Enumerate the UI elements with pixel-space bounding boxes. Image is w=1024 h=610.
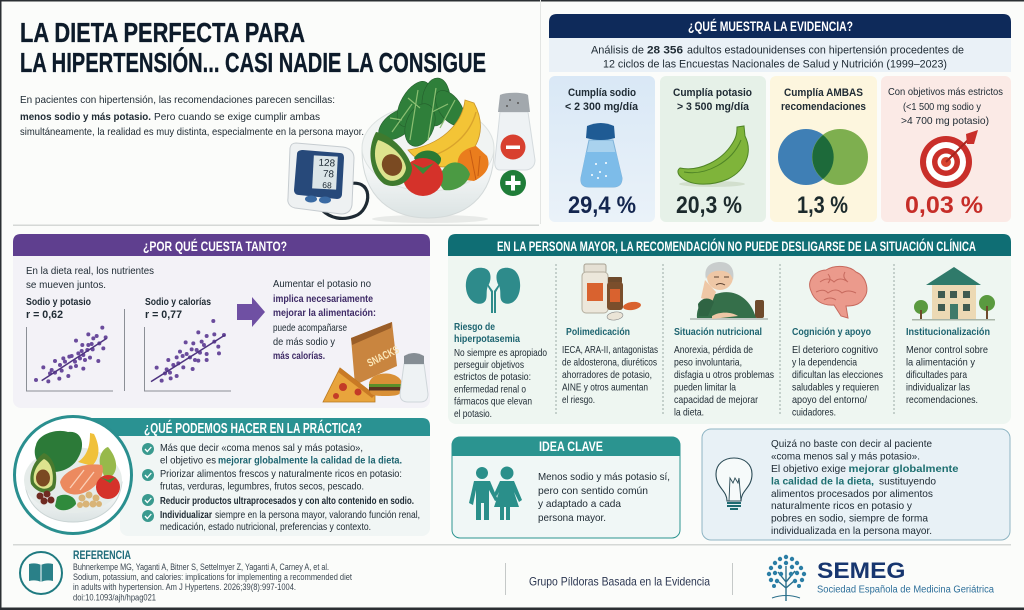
key idea text: y adaptado a cada	[538, 498, 621, 510]
column: institutionalization: Menor control sobre	[906, 344, 988, 356]
icon: processed food: SNACKS	[365, 344, 401, 370]
icon: brain	[810, 266, 867, 318]
column: hyperkalemia: fármacos que elevan	[454, 396, 532, 408]
why header	[13, 234, 430, 256]
column: institutionalization: individualizar las	[906, 382, 970, 394]
callout text: la calidad de la dieta,	[771, 476, 874, 488]
column: hyperkalemia: perseguir objetivos	[454, 359, 524, 371]
column: institutionalization: la alimentación y	[906, 356, 976, 368]
callout text: pobres en sodio, siempre de forma	[771, 512, 928, 524]
column: cognition: apoyo del entorno/	[792, 394, 867, 406]
card: potassium: Cumplía potasio	[673, 87, 752, 99]
intro text	[20, 94, 364, 138]
card: sodium: Cumplía sodio	[568, 87, 636, 99]
column: institutionalization: dificultades para	[906, 369, 967, 381]
column: cognition: dificultan las elecciones	[792, 369, 883, 381]
reference	[20, 550, 352, 602]
venn diagram	[778, 129, 868, 185]
callout text: naturalmente ricos en potasio y	[771, 500, 913, 512]
panel: why it is hard	[13, 234, 430, 408]
column: institutionalization: Institucionalización	[906, 326, 990, 338]
icon: processed food	[323, 322, 428, 402]
evidence intro	[549, 38, 1011, 72]
column: nutrition: Anorexia, pérdida de	[674, 344, 753, 356]
evidence intro: adultos estadounidenses con hipertensión procedentes de	[687, 44, 964, 56]
callout text: «coma menos sal y más potasio».	[771, 450, 920, 462]
card: stricter: (<1 500 mg sodio y	[903, 101, 982, 113]
why conclusion text: mejorar la alimentación:	[273, 307, 376, 319]
evidence header	[549, 14, 1011, 38]
practice list: mejorar globalmente la calidad de la dieta.	[218, 454, 402, 466]
column: institutionalization	[906, 267, 995, 406]
card: stricter: >4 700 mg potasio)	[901, 115, 989, 127]
icon: light bulb	[716, 458, 752, 509]
key idea header: IDEA CLAVE	[539, 439, 603, 454]
icon: tree	[767, 555, 806, 601]
column: cognition: Cognición y apoyo	[792, 326, 871, 338]
intro text: menos sodio y más potasio.	[20, 111, 151, 123]
panel: callout	[702, 429, 1010, 540]
column: hyperkalemia: enfermedad renal o	[454, 384, 526, 396]
panel: key idea	[452, 437, 680, 538]
card: stricter	[881, 76, 1011, 222]
illustration: bowl of vegetables	[362, 76, 494, 223]
column: cognition: El deterioro cognitivo	[792, 344, 878, 356]
intro text: Pero cuando se exige cumplir ambas	[154, 111, 320, 123]
chart: sodium and potassium: Sodio y potasio	[26, 296, 91, 308]
icon: pill bottles	[582, 264, 641, 321]
title: LA DIETA PERFECTA PARA	[20, 17, 305, 48]
column: hyperkalemia: Riesgo de	[454, 321, 495, 333]
logo: SEMEG	[767, 555, 994, 601]
logo: SEMEG: SEMEG	[817, 558, 906, 583]
card: potassium: > 3 500 mg/día	[677, 101, 750, 113]
intro text: En pacientes con hipertensión, las recomendaciones parecen sencillas:	[20, 94, 335, 106]
chart: sodium and potassium	[26, 296, 113, 391]
arrow	[237, 297, 265, 327]
practice header: ¿QUÉ PODEMOS HACER EN LA PRÁCTICA?	[144, 420, 362, 437]
icon: blood pressure monitor: 128	[318, 158, 336, 170]
practice list: siempre en la persona mayor, valorando función renal,	[215, 509, 420, 521]
key idea text	[538, 471, 670, 524]
callout text: alimentos procesados por alimentos	[771, 488, 933, 500]
why conclusion text: más calorías.	[273, 350, 325, 362]
icon: kidneys	[466, 268, 520, 313]
clinical header	[448, 234, 1011, 256]
reference: doi:10.1093/ajh/hpag021	[73, 592, 156, 602]
panel: older person	[448, 234, 1011, 424]
practice list: Individualizar	[160, 509, 212, 521]
card: sodium	[549, 76, 655, 222]
reference: in adults with hypertension. Am J Hypertens. 2026;39(8):997-1004.	[73, 582, 296, 592]
column: polypharmacy: de aldosterona, diuréticos	[562, 356, 657, 368]
icon: older couple	[469, 466, 522, 520]
practice list: medicación, estado nutricional, preferencias y contexto.	[160, 521, 371, 533]
key idea text: persona mayor.	[538, 512, 606, 524]
logo: SEMEG: Sociedad Española de Medicina Geriátrica	[817, 584, 994, 596]
evidence header: ¿QUÉ MUESTRA LA EVIDENCIA?	[688, 19, 853, 34]
column: polypharmacy: Polimedicación	[566, 326, 630, 338]
column: nutrition: pueden limitar la	[674, 382, 736, 394]
icon: target	[920, 130, 978, 188]
icon: blood pressure monitor: 78	[323, 169, 335, 180]
column: nutrition: disfagia u otros problemas	[674, 369, 774, 381]
card: potassium: 20,3 %	[676, 192, 742, 219]
chart: sodium and calories: r = 0,77	[145, 309, 182, 321]
column: hyperkalemia: hiperpotasemia	[454, 333, 520, 345]
why conclusion text: de más sodio y	[273, 336, 336, 348]
practice list: el objetivo es	[160, 454, 216, 466]
card: sodium: < 2 300 mg/día	[565, 101, 639, 113]
column: cognition: saludables y requieren	[792, 382, 879, 394]
practice header	[90, 418, 430, 437]
column: hyperkalemia: el potasio.	[454, 408, 492, 420]
callout text: sustituyendo	[879, 476, 936, 488]
panel: evidence	[549, 14, 1011, 222]
callout text	[771, 438, 959, 537]
column: polypharmacy: AINE y otros aumentan	[562, 382, 648, 394]
key idea text: Menos sodio y más potasio sí,	[538, 471, 670, 483]
panel: what to do in practice	[14, 416, 430, 536]
column: cognition	[792, 266, 883, 418]
why intro text: se mueven juntos.	[26, 279, 106, 291]
icon: blood pressure monitor: 68	[322, 180, 332, 190]
card: both: recomendaciones	[781, 101, 866, 113]
evidence intro: 12 ciclos de las Encuestas Nacionales de Salud y Nutrición (1999–2023)	[603, 58, 947, 70]
key idea header	[452, 437, 680, 456]
icon: salt shaker with minus and plus	[495, 93, 535, 196]
card: stricter: Con objetivos más estrictos	[888, 86, 1003, 98]
column: cognition: y la dependencia	[792, 356, 857, 368]
card: both	[770, 76, 877, 222]
callout text: individualizada en la persona mayor.	[771, 525, 932, 537]
intro text: simultáneamente, la realidad es muy distinta, especialmente en la persona mayor.	[20, 126, 364, 138]
practice list: Reducir productos ultraprocesados y con alto contenido en sodio.	[160, 495, 414, 507]
column: polypharmacy: IECA, ARA-II, antagonistas	[562, 344, 658, 356]
evidence intro: Análisis de	[591, 44, 644, 56]
column: nutrition: la dieta.	[674, 406, 704, 418]
chart: sodium and potassium: r = 0,62	[26, 309, 63, 321]
evidence intro: 28 356	[647, 44, 683, 56]
column: nutrition	[674, 262, 774, 418]
column: hyperkalemia: No siempre es apropiado	[454, 347, 547, 359]
why intro text: En la dieta real, los nutrientes	[26, 265, 154, 277]
why conclusion text: puede acompañarse	[273, 322, 347, 334]
column: polypharmacy: el riesgo.	[562, 394, 595, 406]
reference: Sodium, potassium, and calories: implications for implementing a recommended diet	[73, 572, 352, 582]
icon: nursing home building	[912, 267, 995, 320]
footer group name: Grupo Píldoras Basada en la Evidencia	[529, 574, 710, 588]
column: polypharmacy: ahorradores de potasio,	[562, 369, 652, 381]
why conclusion text: Aumentar el potasio no	[273, 278, 371, 290]
card: stricter: 0,03 %	[905, 192, 983, 219]
column: cognition: cuidadores.	[792, 406, 836, 418]
chart: sodium and calories	[144, 296, 231, 391]
key idea text: pero con sentido común	[538, 485, 648, 497]
icon: blood pressure monitor	[288, 143, 368, 218]
illustration: healthy bowl	[14, 416, 132, 534]
practice list: Más que decir «coma menos sal y más potasio»,	[160, 442, 363, 454]
icon: book	[20, 552, 62, 594]
column: hyperkalemia: estrictos de potasio:	[454, 371, 531, 383]
column: nutrition: peso involuntaria,	[674, 356, 742, 368]
column: nutrition: capacidad de mejorar	[674, 394, 758, 406]
icon: green banana	[678, 126, 748, 187]
reference: REFERENCIA	[73, 550, 131, 562]
icon: worried old man	[690, 262, 768, 320]
why header: ¿POR QUÉ CUESTA TANTO?	[143, 239, 287, 254]
why conclusion text: implica necesariamente	[273, 293, 373, 305]
callout text: Quizá no baste con decir al paciente	[771, 438, 932, 450]
card: both: Cumplía AMBAS	[784, 87, 863, 99]
column: institutionalization: recomendaciones.	[906, 394, 978, 406]
column: polypharmacy	[562, 264, 658, 406]
title: LA HIPERTENSIÓN... CASI NADIE LA CONSIGUE	[20, 47, 486, 78]
chart: sodium and calories: Sodio y calorías	[145, 296, 211, 308]
reference: Buhnerkempe MG, Yaganti A, Bitner S, Settelmyer Z, Yaganti A, Carney A, et al.	[73, 562, 329, 572]
card: potassium	[660, 76, 766, 222]
practice list	[142, 442, 420, 533]
card: both: 1,3 %	[797, 192, 848, 219]
why intro text	[26, 265, 154, 291]
title	[20, 17, 486, 78]
card: sodium: 29,4 %	[568, 192, 636, 219]
practice list: Priorizar alimentos frescos y naturalmente ricos en potasio:	[160, 468, 402, 480]
column: nutrition: Situación nutricional	[674, 326, 762, 338]
callout text: El objetivo exige	[771, 463, 846, 475]
practice list: frutas, verduras, legumbres, frutos secos, pescado.	[160, 480, 364, 492]
column: hyperkalemia	[454, 268, 547, 420]
icon: blue salt shaker	[581, 123, 622, 187]
callout text: mejorar globalmente	[848, 463, 959, 475]
why conclusion text	[273, 278, 376, 362]
